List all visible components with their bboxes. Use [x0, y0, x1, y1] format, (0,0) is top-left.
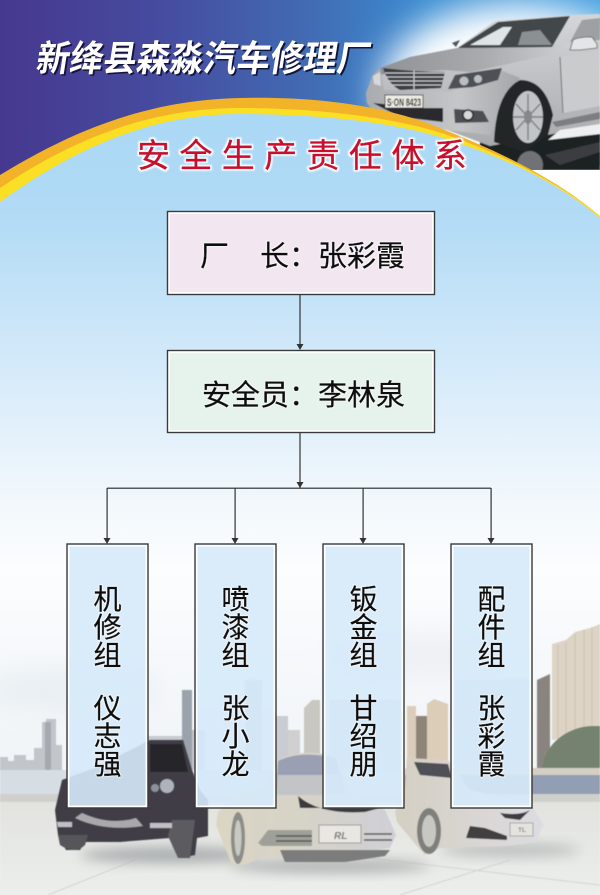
group box: parts	[451, 544, 532, 808]
group box: paint: 漆	[221, 606, 250, 646]
group box: parts: 彩	[477, 715, 506, 755]
car shadows on ground	[80, 843, 580, 873]
group box: parts: 霞	[477, 743, 506, 783]
group box: parts: 件	[477, 606, 506, 646]
box: factory director	[168, 212, 434, 294]
group box: sheet metal: 钣	[349, 578, 378, 618]
group box: machine repair: 修	[93, 606, 122, 646]
group box: paint	[195, 544, 276, 808]
group box: sheet metal	[323, 544, 404, 808]
box: safety officer	[168, 350, 434, 432]
company title: 新绛县森淼汽车修理厂	[33, 30, 375, 82]
box: safety officer: 安全员：李林泉	[202, 372, 405, 414]
group box: sheet metal: 朋	[349, 743, 378, 783]
header band: purple-blue gradient	[0, 0, 600, 175]
group box: paint: 龙	[221, 743, 250, 783]
group box: parts: 组	[477, 634, 506, 674]
group box: sheet metal: 绍	[349, 715, 378, 755]
group box: machine repair: 志	[93, 715, 122, 755]
left SUV	[55, 740, 208, 858]
group box: machine repair: 机	[93, 578, 122, 618]
city skyline	[0, 624, 600, 895]
group box: machine repair	[67, 544, 148, 808]
group box: sheet metal: 甘	[349, 687, 378, 727]
group box: machine repair: 强	[93, 743, 122, 783]
connector: director to safety officer	[296, 294, 304, 350]
connector: safety officer to groups	[104, 432, 494, 544]
right sedan	[395, 758, 544, 855]
right sedan: TL	[518, 827, 526, 834]
group box: sheet metal: 金	[349, 606, 378, 646]
group box: paint: 组	[221, 634, 250, 674]
arc: yellow band	[0, 108, 600, 240]
group box: machine repair: 组	[93, 634, 122, 674]
clouds	[0, 633, 510, 712]
group box: parts: 张	[477, 687, 506, 727]
group box: machine repair: 仪	[93, 687, 122, 727]
group box: paint: 喷	[221, 578, 250, 618]
group box: paint: 张	[221, 687, 250, 727]
arc: orange band	[0, 98, 600, 240]
top car: silver sedan	[366, 14, 600, 179]
group box: paint: 小	[221, 715, 250, 755]
top car: silver sedan: S·ON 8423	[387, 97, 421, 109]
company title: 新绛县森淼汽车修理厂	[35, 31, 377, 84]
box: factory director: 厂	[200, 233, 229, 275]
group box: sheet metal: 组	[349, 634, 378, 674]
centre sedan	[216, 753, 396, 865]
box: factory director: 长：张彩霞	[260, 233, 405, 275]
centre sedan: RL	[334, 831, 347, 842]
heading: safety responsibility system: 安全生产责任体系	[137, 129, 476, 177]
group box: parts: 配	[477, 578, 506, 618]
